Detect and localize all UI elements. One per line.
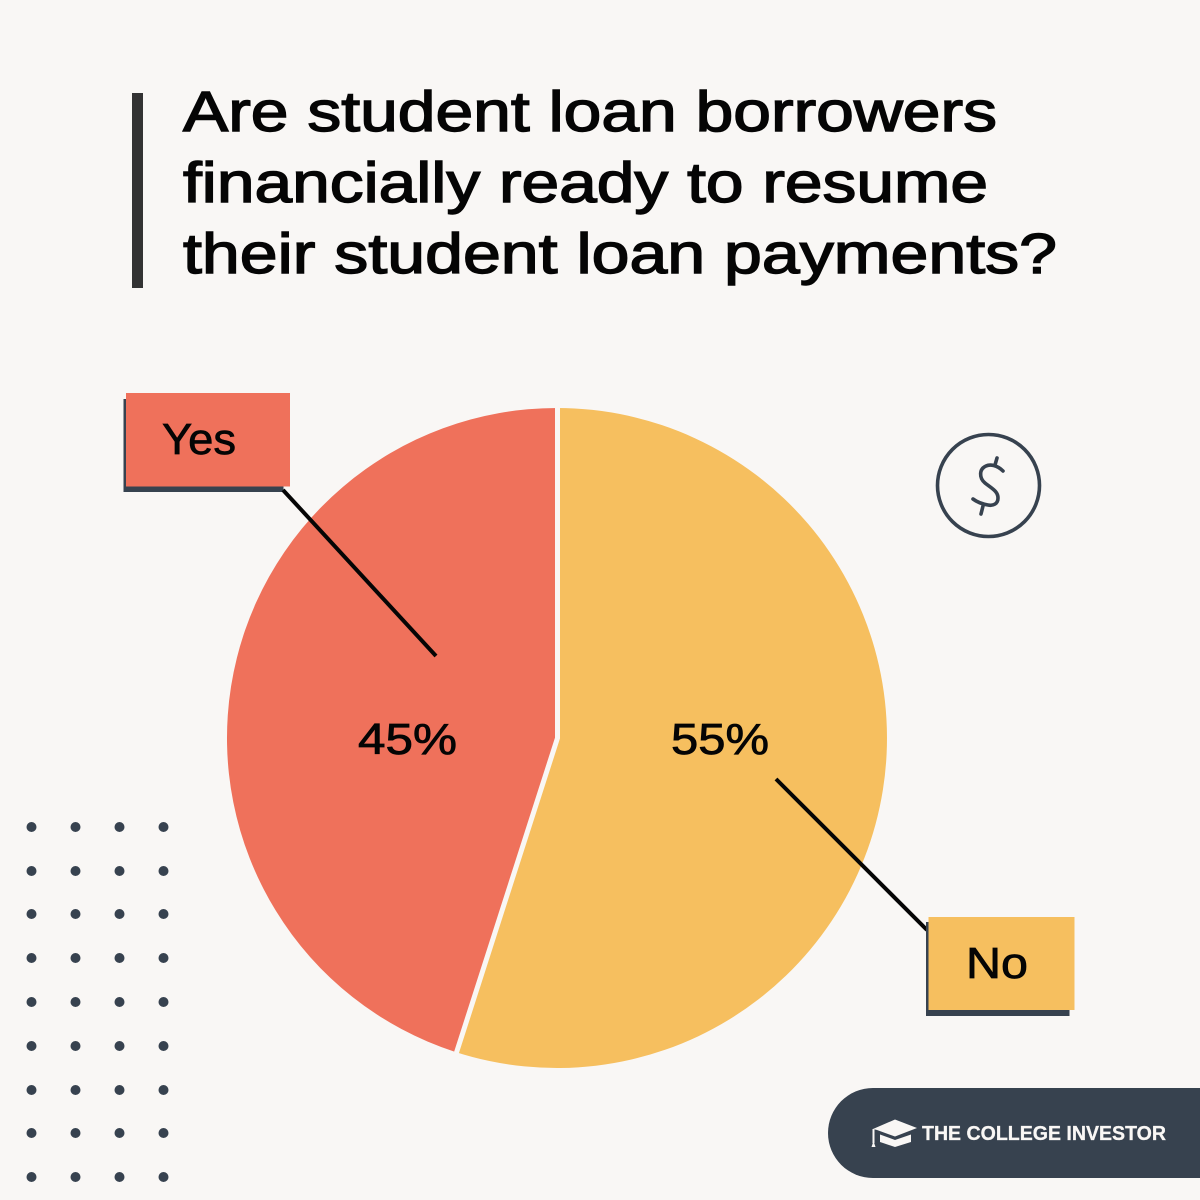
icon: dollar coin bbox=[938, 434, 1040, 536]
icon: graduation cap bbox=[872, 1120, 917, 1147]
label: No bbox=[926, 917, 1074, 1016]
slice separator bbox=[456, 405, 558, 1054]
value: 45%: 45% bbox=[358, 715, 457, 764]
leader line: Yes bbox=[283, 490, 436, 656]
title bbox=[183, 80, 1057, 286]
slice: Yes 45% bbox=[227, 408, 557, 1052]
value: 55%: 55% bbox=[671, 715, 769, 764]
slice: No 55% bbox=[455, 408, 887, 1068]
title: Are student loan borrowers bbox=[183, 80, 997, 144]
label: Yes: Yes bbox=[162, 415, 236, 464]
logo wordmark: THE COLLEGE INVESTOR bbox=[922, 1122, 1166, 1145]
leader line: No bbox=[776, 779, 927, 930]
logo badge bbox=[828, 1088, 1200, 1178]
title accent bar bbox=[132, 93, 143, 288]
label: No: No bbox=[966, 939, 1028, 988]
label: Yes bbox=[124, 393, 290, 492]
title: their student loan payments? bbox=[183, 222, 1057, 286]
dot grid decoration bbox=[26, 822, 168, 1182]
pie chart bbox=[227, 405, 887, 1068]
title: financially ready to resume bbox=[183, 151, 988, 215]
